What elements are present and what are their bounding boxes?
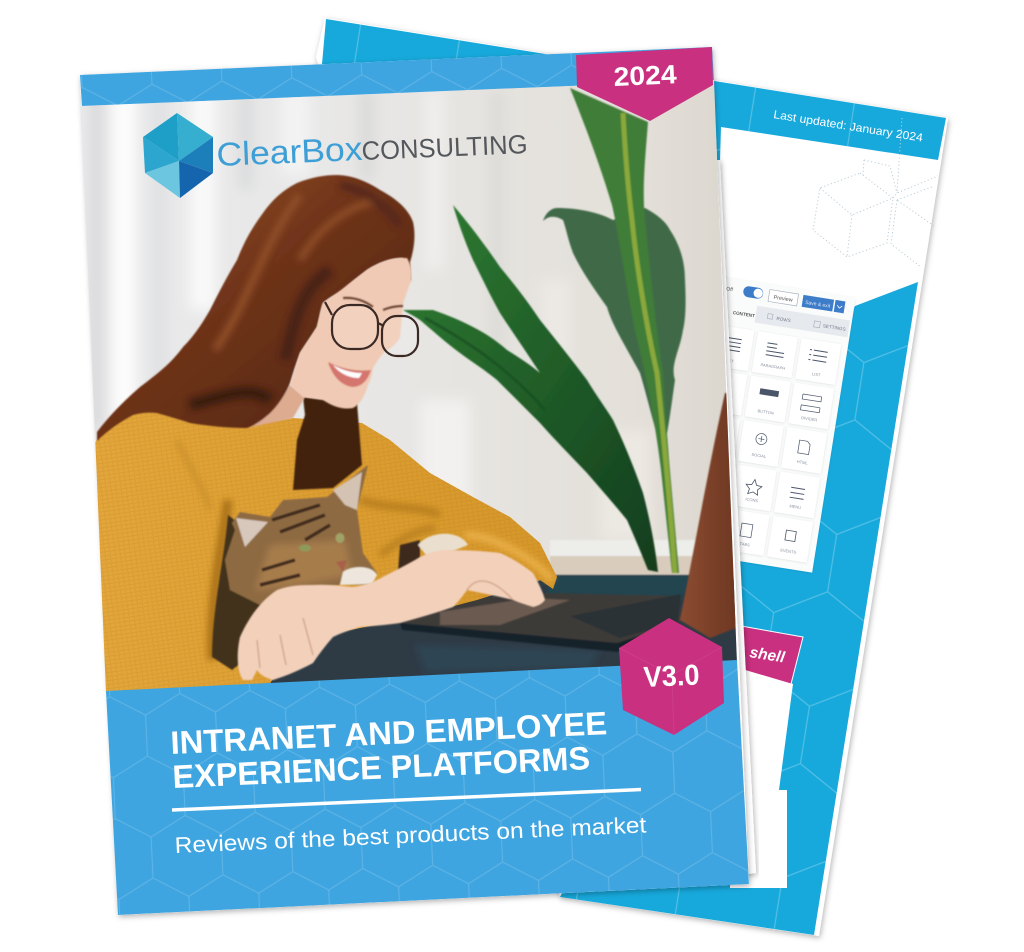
widget tiles: [680, 324, 841, 563]
back wide leaf: [543, 208, 686, 455]
tile labels: [697, 356, 825, 555]
title rule: [172, 790, 641, 810]
page builder widget panel: [624, 268, 856, 573]
wall and curtain: [81, 80, 737, 660]
tall leaf: [570, 88, 679, 573]
report title: INTRANET AND EMPLOYEE: [170, 705, 608, 761]
middle sheet edge: [700, 160, 756, 880]
dark hair behind neck: [293, 397, 362, 490]
front cover: [70, 47, 750, 915]
tile labels: LIST: [812, 371, 821, 378]
eyebrow: [343, 298, 403, 310]
wall ledge: [550, 540, 740, 578]
toolbar: s Off: [722, 286, 734, 293]
version hexagon badge: [619, 618, 724, 735]
pink label text: shell: [748, 644, 787, 667]
tile labels: HTML: [797, 459, 809, 466]
smile: [328, 362, 371, 387]
cat body: [211, 514, 262, 671]
tabs: [732, 302, 850, 337]
back document page: [316, 18, 948, 936]
bottom blue panel: [106, 660, 749, 915]
subtitle: Reviews of the best products on the market: [174, 812, 648, 858]
logo wordmark ClearBox: ClearBox: [216, 130, 364, 173]
plant leaves: [403, 88, 686, 573]
arm and hands: [238, 550, 545, 680]
white content block: [730, 660, 793, 888]
tabs: ROWS: [776, 316, 791, 323]
sweater: [93, 408, 557, 697]
cover photo: woman with cat and laptop: [70, 70, 750, 700]
back page blue panel: [560, 282, 918, 935]
dotted cube outlines: [813, 118, 938, 267]
neck: [247, 385, 305, 428]
year badge: [576, 47, 713, 121]
finger lines: [257, 581, 513, 668]
last updated text: Last updated: January 2024: [773, 109, 924, 145]
table: [270, 574, 737, 683]
tabs: CONTENT: [732, 310, 755, 318]
diagonal leaves: [403, 205, 658, 572]
lower leaf fold: [425, 318, 545, 410]
tile labels: ICONS: [745, 496, 759, 503]
tile labels: BUTTON: [757, 408, 774, 416]
cover base sheet: [80, 47, 749, 915]
logo wordmark Consulting: CONSULTING: [361, 129, 528, 166]
cat ears: [236, 518, 268, 547]
report title: [170, 705, 608, 795]
tile icons: [696, 336, 829, 545]
cat warm face: [255, 540, 352, 590]
year text: 2024: [613, 59, 677, 92]
glasses: [325, 302, 418, 356]
cat paw: [398, 540, 420, 572]
version text: V3.0: [643, 659, 700, 694]
logo cube icon: [143, 113, 213, 198]
cat: [212, 465, 468, 670]
laptop: [400, 393, 745, 652]
laptop deck: [400, 593, 680, 644]
tall leaf midrib: [623, 113, 675, 573]
pink heading label: [730, 624, 803, 684]
tile labels: MENU: [789, 503, 802, 510]
back page blue header band: [322, 19, 946, 160]
hair: [97, 175, 414, 441]
laptop screen: [680, 393, 745, 638]
face: [290, 258, 411, 409]
cat head: [225, 465, 377, 605]
back page white sheet: [316, 18, 948, 936]
tabs: SETTINGS: [822, 323, 846, 332]
toolbar: Save & exit: [805, 300, 831, 310]
logo: ClearBox Consulting: [143, 113, 528, 198]
tile labels: DIVIDER: [801, 415, 818, 423]
tile labels: EVENTS: [780, 547, 797, 555]
cat eyes: [299, 544, 311, 552]
toolbar: [722, 282, 845, 313]
tile labels: SOCIAL: [751, 452, 767, 459]
top blue band: [80, 47, 714, 107]
tile labels: TABS: [739, 541, 750, 548]
tile labels: LIST: [725, 357, 734, 364]
cat stripes: [260, 505, 330, 585]
report title: EXPERIENCE PLATFORMS: [172, 740, 591, 795]
toolbar: Preview: [773, 295, 793, 304]
cat nose and muzzle: [336, 560, 347, 571]
tile labels: PARAGRAPH: [760, 362, 786, 371]
